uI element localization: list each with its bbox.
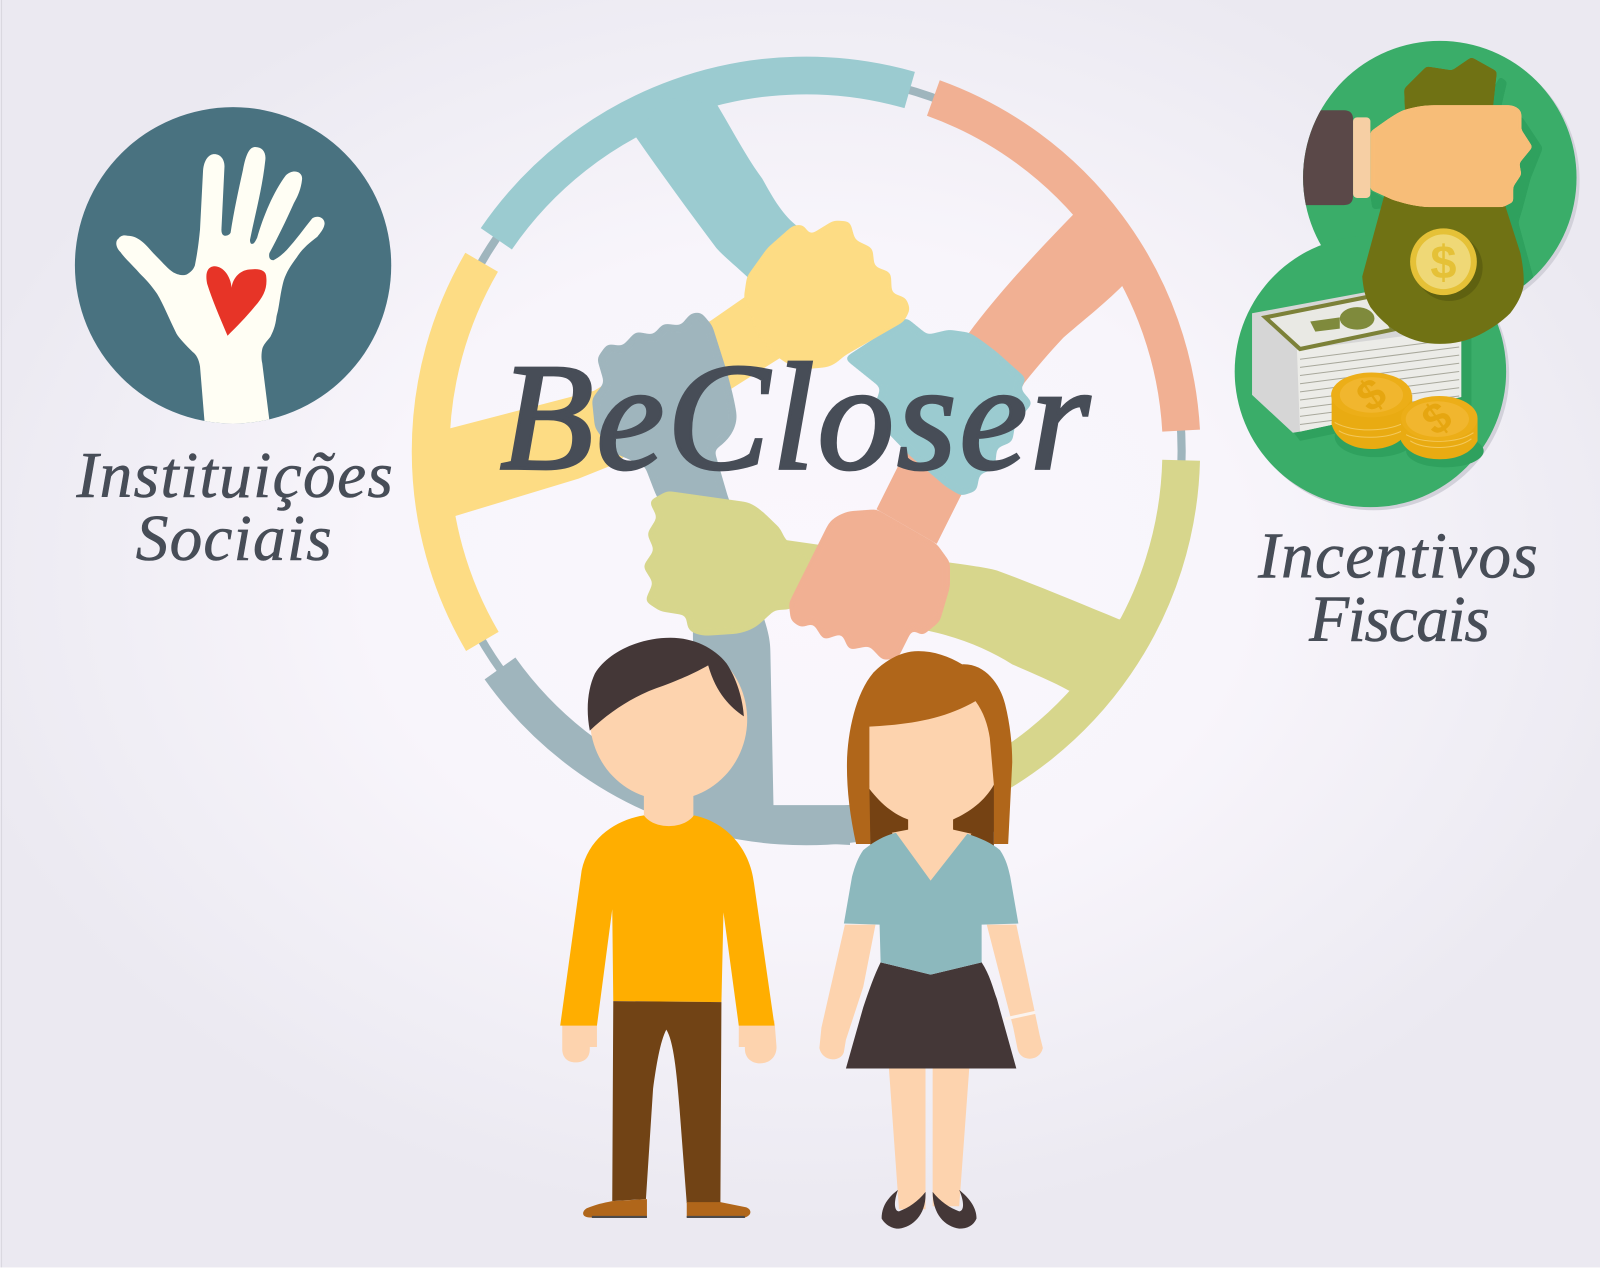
circle shadow top bbox=[1306, 44, 1580, 317]
woman shoes bbox=[882, 1190, 977, 1229]
bag neck bbox=[1404, 57, 1497, 117]
arm: yellow bbox=[429, 297, 780, 516]
sleeve bbox=[1303, 110, 1354, 206]
coin stack lines bbox=[1335, 420, 1408, 437]
coin stack side bbox=[1332, 395, 1412, 449]
ring segment: gray bbox=[500, 668, 888, 826]
arm: blue bbox=[636, 97, 798, 291]
label: Incentivos Fiscais bbox=[1257, 521, 1538, 656]
ring segment: blue bbox=[496, 75, 910, 239]
coin stack side bbox=[1401, 418, 1478, 459]
top green circle bbox=[1303, 41, 1577, 314]
money stack lines bbox=[1300, 339, 1459, 425]
thin connecting ring bbox=[431, 76, 1182, 827]
coin stack face bbox=[1406, 401, 1469, 437]
dollar sign: $ bbox=[1348, 369, 1395, 422]
coin stack shadow bbox=[1406, 435, 1484, 467]
circle shadow bottom bbox=[1238, 239, 1509, 510]
red heart bbox=[206, 266, 266, 336]
open hand bbox=[116, 147, 325, 429]
figure: man bbox=[560, 638, 777, 1217]
fist: salmon bbox=[789, 509, 950, 660]
gold coin on bag bbox=[1410, 228, 1483, 301]
man sweater bbox=[560, 815, 774, 1026]
woman skirt bbox=[846, 962, 1016, 1068]
bottom green circle bbox=[1235, 236, 1506, 507]
panel: hands ring bbox=[429, 75, 1182, 845]
woman bracelet bbox=[1005, 1012, 1035, 1019]
woman legs bbox=[889, 1066, 969, 1209]
cuff bbox=[1353, 117, 1370, 198]
text line 2: Fiscais bbox=[1308, 584, 1490, 656]
money stack front face bbox=[1297, 329, 1461, 432]
banknote rectangle bbox=[1310, 317, 1340, 332]
arm: gray bbox=[693, 619, 850, 845]
ring segment: yellow bbox=[431, 262, 482, 641]
coin stack top bbox=[1401, 396, 1478, 441]
woman blouse bbox=[844, 833, 1018, 975]
money stack left face bbox=[1252, 292, 1461, 433]
shoe soles bbox=[592, 1216, 745, 1218]
coin shadow bbox=[1415, 234, 1483, 301]
arm: salmon bbox=[877, 213, 1138, 544]
woman arms bbox=[819, 925, 1043, 1059]
coin rim bbox=[1410, 228, 1477, 295]
icon: social institutions hand with heart bbox=[75, 107, 391, 429]
fist: yellow bbox=[744, 220, 910, 369]
coin stack shadow bbox=[1335, 416, 1416, 457]
text line 1: Instituições bbox=[76, 440, 393, 512]
woman face and neck bbox=[869, 701, 994, 888]
left edge line bbox=[1, 0, 2, 1267]
man hands bbox=[562, 1020, 777, 1063]
man left shoe bbox=[583, 1199, 647, 1217]
dollar sign: $ bbox=[1414, 392, 1461, 445]
bottom edge bbox=[0, 1267, 1600, 1270]
fist: blue bbox=[844, 317, 1033, 496]
man trousers bbox=[612, 1001, 721, 1203]
coin stack top bbox=[1331, 372, 1412, 417]
money stack shadow bbox=[1294, 327, 1471, 441]
hand bbox=[1370, 105, 1533, 207]
figure: woman bbox=[819, 651, 1043, 1229]
banknote portrait bbox=[1340, 307, 1374, 330]
arm: khaki bbox=[785, 540, 1153, 691]
man hair bbox=[588, 638, 744, 731]
teal circle bbox=[75, 107, 391, 424]
man face and neck bbox=[590, 639, 747, 832]
coin stack face bbox=[1340, 377, 1403, 413]
woman hair bbox=[847, 651, 1012, 844]
ring segment: salmon bbox=[933, 98, 1181, 431]
text line 1: Incentivos bbox=[1257, 521, 1538, 593]
coin stack 1 bbox=[1331, 369, 1416, 457]
coin stack lines bbox=[1406, 433, 1473, 448]
icon: tax incentives money bbox=[1235, 41, 1580, 510]
bag and hand shadow bbox=[1370, 78, 1542, 286]
text line 2: Sociais bbox=[136, 503, 332, 575]
dollar sign: $ bbox=[1430, 237, 1457, 289]
coin stack 2 bbox=[1401, 392, 1484, 467]
banknote on top bbox=[1265, 296, 1393, 349]
fist: gray bbox=[592, 312, 740, 531]
man right shoe bbox=[687, 1202, 750, 1217]
ring segment: khaki bbox=[949, 460, 1181, 798]
coin face bbox=[1416, 234, 1471, 289]
woman hair shadow bbox=[869, 784, 994, 846]
label: Instituições Sociais bbox=[76, 440, 393, 575]
title: BeCloser bbox=[500, 333, 1091, 502]
fist: khaki bbox=[643, 491, 827, 636]
bag body bbox=[1362, 194, 1524, 344]
